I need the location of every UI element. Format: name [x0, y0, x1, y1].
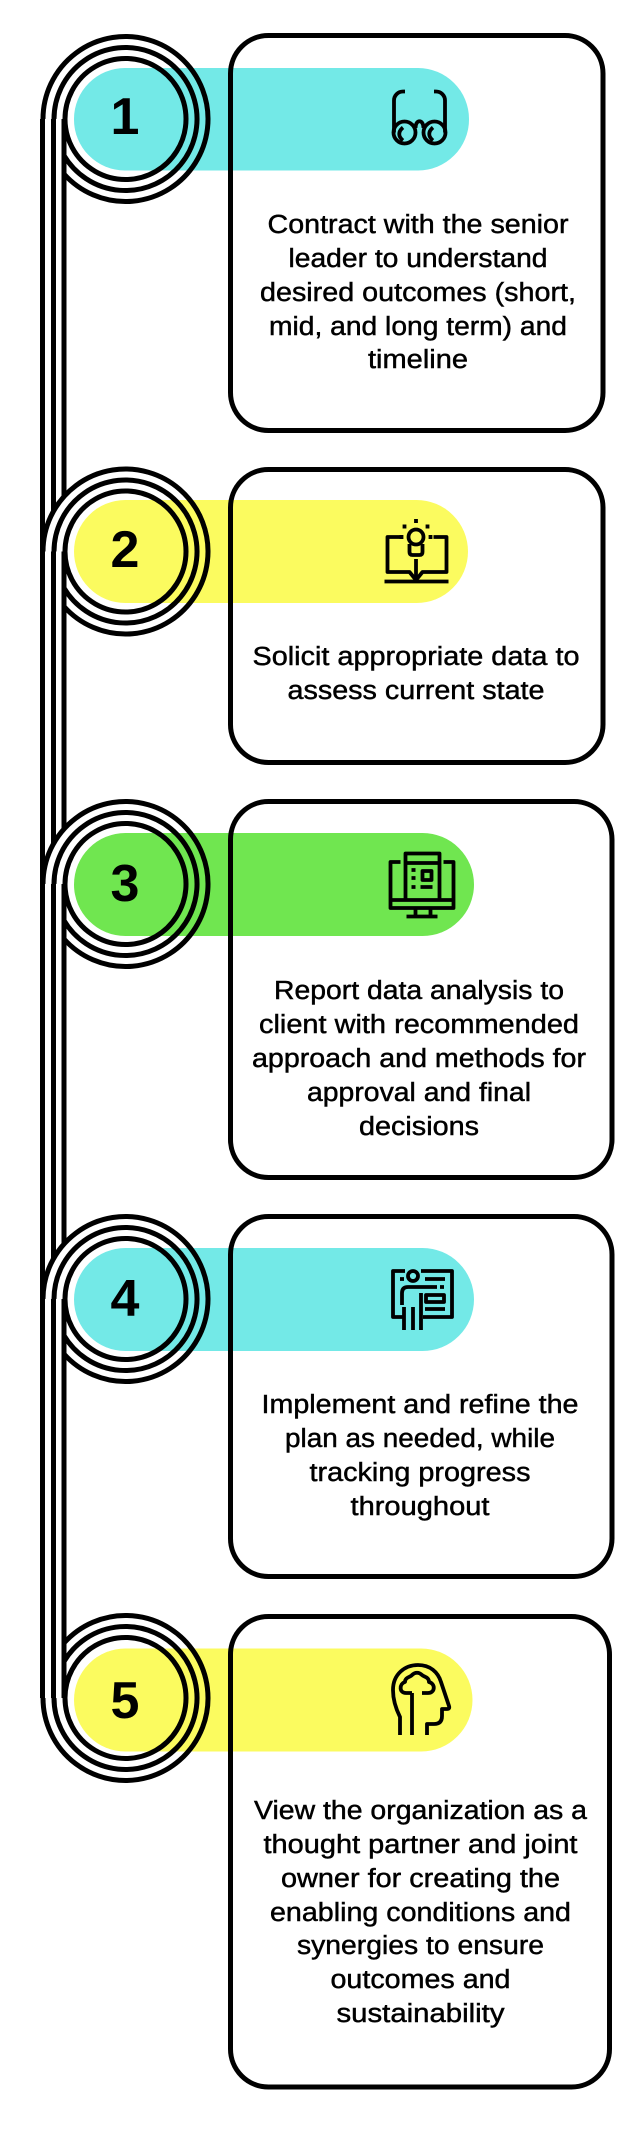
step 1 colored pill: [74, 68, 469, 170]
ring group 4: [43, 1217, 208, 1382]
ring group 2: [43, 469, 208, 634]
step 4 description: throughout: [350, 1493, 490, 1521]
step 5 description: [254, 1797, 588, 2028]
step 4 number: 4: [111, 1270, 140, 1328]
step 2 description: assess current state: [288, 677, 544, 705]
step 5 description: sustainability: [336, 2000, 505, 2028]
step 3 card: [230, 802, 612, 1178]
connector lines: [42, 119, 64, 1698]
step 3 colored pill: [74, 833, 474, 936]
step 5 description: synergies to ensure: [297, 1932, 544, 1960]
step 5 description: thought partner and joint: [264, 1831, 578, 1859]
step 2 number: 2: [111, 521, 139, 579]
panel: step 5: [74, 1616, 610, 2087]
step 4 description: [262, 1391, 578, 1521]
step 4 card: [230, 1216, 612, 1576]
step 4 colored pill: [74, 1248, 474, 1351]
step 1 description: mid, and long term) and: [269, 313, 567, 341]
step 3 description: decisions: [359, 1113, 479, 1141]
step 3 description: [252, 977, 587, 1141]
step 5 card: [230, 1616, 610, 2087]
panel: step 1: [74, 36, 603, 430]
ring group 3: [43, 802, 208, 967]
step 4 description: tracking progress: [310, 1459, 530, 1487]
icon: glasses: [394, 92, 446, 144]
panel: step 3: [74, 802, 612, 1178]
step 5 description: enabling conditions and: [270, 1899, 571, 1927]
step 5 description: View the organization as a: [254, 1797, 588, 1825]
icon: book with light bulb: [384, 519, 448, 582]
icon: monitor with document: [390, 854, 454, 916]
step 4 description: plan as needed, while: [285, 1425, 555, 1453]
step 1 description: Contract with the senior: [268, 211, 569, 239]
step 2 colored pill: [74, 500, 468, 603]
step 1 description: desired outcomes (short,: [260, 279, 576, 307]
panel: step 4: [74, 1216, 612, 1576]
step 5 number: 5: [111, 1672, 139, 1730]
icon: head with tree: [393, 1665, 449, 1735]
step 1 description: leader to understand: [288, 245, 548, 273]
ring group 1: [43, 37, 208, 202]
step 2 card: [230, 470, 603, 762]
ring group 5: [43, 1615, 208, 1780]
step 1 description: timeline: [368, 346, 468, 374]
step 1 description: [260, 211, 576, 374]
step 3 description: client with recommended: [259, 1011, 579, 1039]
icon: presenter at board: [393, 1271, 452, 1330]
timeline: concentric rings and vertical lines: [42, 37, 208, 1780]
step 2 description: [252, 643, 580, 705]
step 1 card: [230, 36, 603, 430]
panel: step 2: [74, 470, 603, 762]
step 4 description: Implement and refine the: [262, 1391, 578, 1419]
step 5 description: owner for creating the: [281, 1865, 560, 1893]
step 5 colored pill: [74, 1648, 472, 1752]
step 3 number: 3: [111, 855, 139, 913]
step 5 description: outcomes and: [330, 1966, 510, 1994]
step 3 description: approach and methods for: [252, 1045, 587, 1073]
step 2 description: Solicit appropriate data to: [252, 643, 580, 671]
step 3 description: approval and final: [307, 1079, 531, 1107]
step 1 number: 1: [111, 88, 139, 146]
step 3 description: Report data analysis to: [274, 977, 564, 1005]
